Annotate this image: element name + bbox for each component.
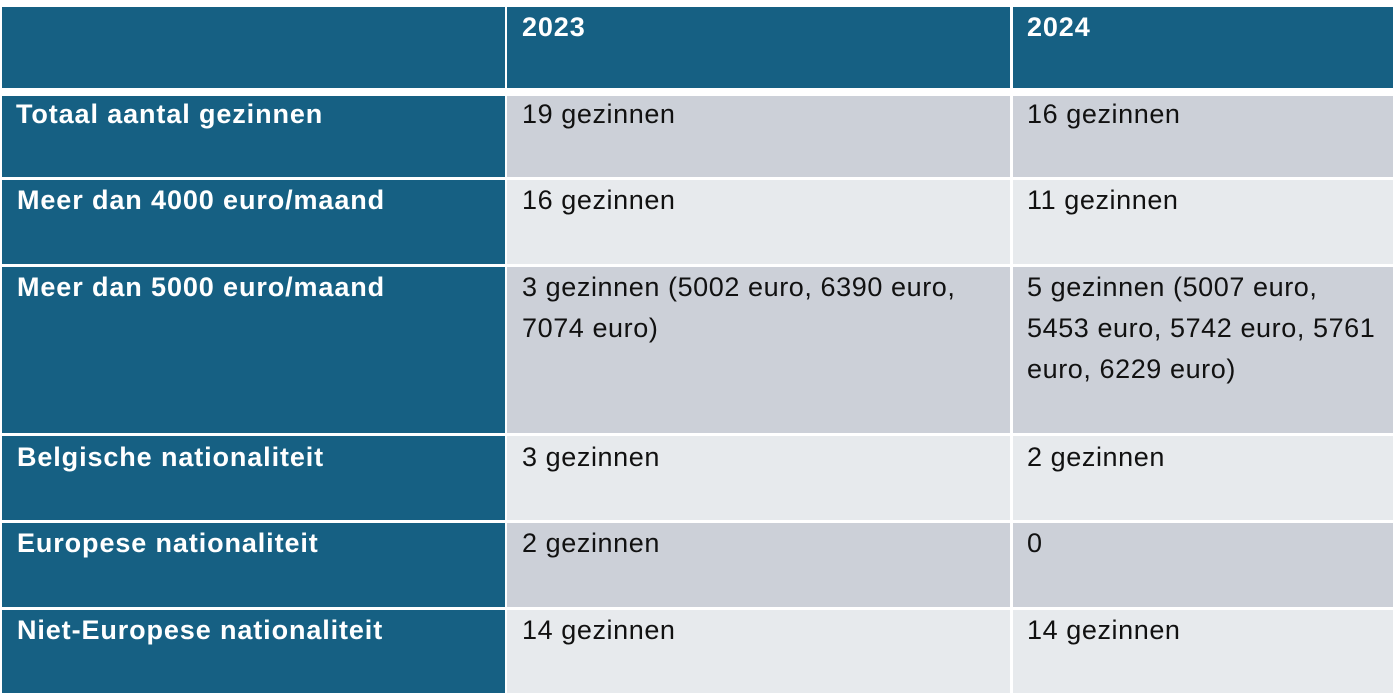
value 2023: niet-europese nationaliteit: 14 gezinnen — [522, 615, 676, 645]
value 2023: europese nationaliteit — [507, 523, 1010, 607]
value 2024: meer dan 5000: euro, 6229 euro) — [1027, 354, 1236, 384]
value 2024: totaal: 16 gezinnen — [1027, 99, 1181, 129]
row label: totaal — [2, 96, 505, 177]
header cell: 2023: 2023 — [522, 12, 586, 42]
value 2023: meer dan 5000: 7074 euro) — [522, 313, 658, 343]
value 2023: totaal: 19 gezinnen — [522, 99, 676, 129]
row label: meer dan 5000: Meer dan 5000 euro/maand — [17, 272, 385, 302]
value 2023: meer dan 4000: 16 gezinnen — [522, 185, 676, 215]
value 2024: meer dan 5000: 5453 euro, 5742 euro, 5761 — [1027, 313, 1375, 343]
value 2024: totaal — [1013, 96, 1393, 177]
value 2023: meer dan 4000 — [507, 180, 1010, 264]
row label: meer dan 4000: Meer dan 4000 euro/maand — [17, 185, 385, 215]
row label: meer dan 5000 — [2, 267, 505, 433]
row label: meer dan 4000 — [2, 180, 505, 264]
value 2023: niet-europese nationaliteit — [507, 610, 1010, 693]
header cell: 2024 — [1013, 7, 1393, 88]
value 2024: meer dan 4000: 11 gezinnen — [1027, 185, 1179, 215]
value 2024: niet-europese nationaliteit: 14 gezinnen — [1027, 615, 1181, 645]
value 2023: europese nationaliteit: 2 gezinnen — [522, 528, 660, 558]
value 2024: meer dan 5000: 5 gezinnen (5007 euro, — [1027, 272, 1317, 302]
row label: europese nationaliteit — [2, 523, 505, 607]
value 2024: niet-europese nationaliteit — [1013, 610, 1393, 693]
value 2023: meer dan 5000 — [507, 267, 1010, 433]
row label: belgische nationaliteit — [2, 436, 505, 520]
row label: niet-europese nationaliteit: Niet-Europese nationaliteit — [17, 615, 383, 645]
value 2024: belgische nationaliteit — [1013, 436, 1393, 520]
value 2024: meer dan 4000 — [1013, 180, 1393, 264]
value 2024: belgische nationaliteit: 2 gezinnen — [1027, 442, 1165, 472]
value 2024: europese nationaliteit: 0 — [1027, 528, 1043, 558]
value 2024: europese nationaliteit — [1013, 523, 1393, 607]
header cell: 2024: 2024 — [1027, 12, 1091, 42]
value 2023: belgische nationaliteit: 3 gezinnen — [522, 442, 660, 472]
value 2023: meer dan 5000: 3 gezinnen (5002 euro, 6390 euro, — [522, 272, 955, 302]
row label: belgische nationaliteit: Belgische nationaliteit — [17, 442, 324, 472]
value 2023: belgische nationaliteit — [507, 436, 1010, 520]
row label: europese nationaliteit: Europese nationaliteit — [17, 528, 319, 558]
header cell: empty — [2, 7, 505, 88]
header cell: 2023 — [507, 7, 1010, 88]
row label: niet-europese nationaliteit — [2, 610, 505, 693]
value 2023: totaal — [507, 96, 1010, 177]
value 2024: meer dan 5000 — [1013, 267, 1393, 433]
row label: totaal: Totaal aantal gezinnen — [16, 99, 323, 129]
